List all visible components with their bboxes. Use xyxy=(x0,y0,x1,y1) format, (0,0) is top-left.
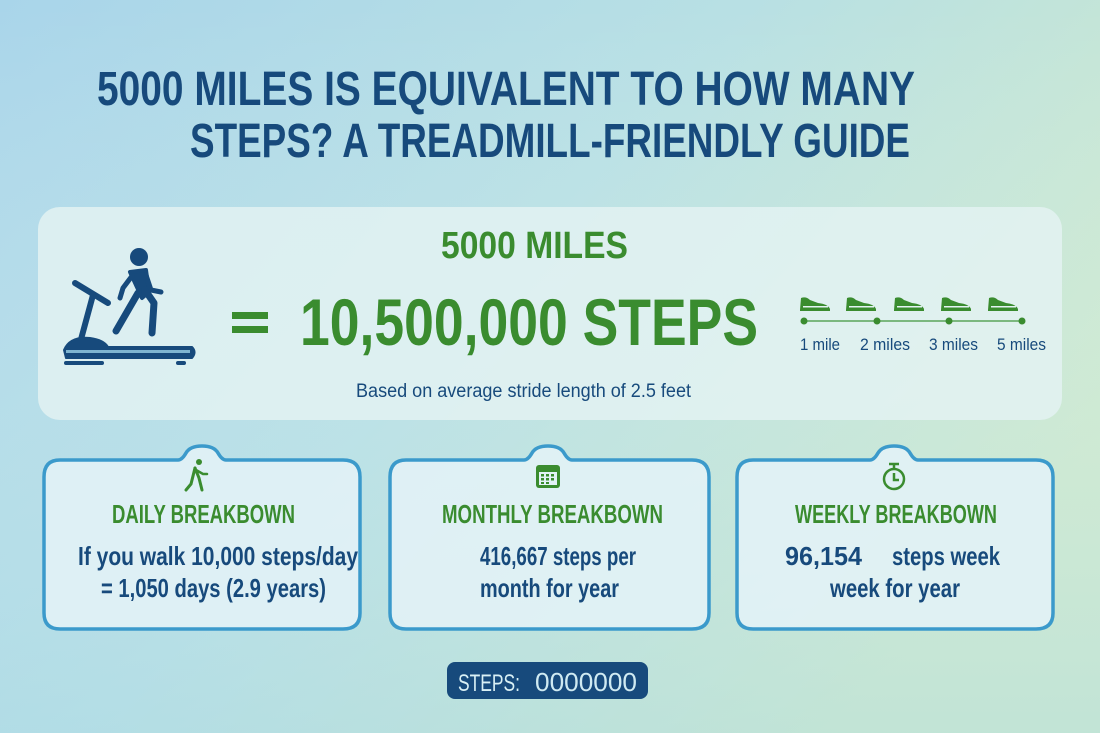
heading: 5000 miles: 5000 MILES xyxy=(441,225,628,267)
mile scale with shoes: 3 miles xyxy=(929,335,978,354)
step counter xyxy=(447,662,648,699)
panel: monthly breakdown: month for year xyxy=(480,573,619,603)
step counter: 0000000 xyxy=(535,667,637,697)
title xyxy=(97,63,915,168)
panel: weekly breakdown: WEEKLY BREAKBOWN xyxy=(795,499,997,529)
panel: daily breakdown: = 1,050 days (2.9 years) xyxy=(101,573,326,603)
panel: daily breakdown xyxy=(44,446,360,629)
title: STEPS? A TREADMILL-FRIENDLY GUIDE xyxy=(190,115,910,168)
panel: weekly breakdown: 96,154 xyxy=(785,541,863,571)
panel: monthly breakdown: MONTHLY BREAKBOWN xyxy=(442,499,663,529)
panel: daily breakdown: If you walk 10,000 steps/day xyxy=(78,541,358,571)
panel: monthly breakdown xyxy=(390,446,709,629)
icon: treadmill xyxy=(64,248,194,363)
note: stride length: Based on average stride length of 2.5 feet xyxy=(356,381,692,402)
mile scale with shoes: 5 miles xyxy=(997,335,1046,354)
step counter: STEPS: xyxy=(458,670,520,697)
mile scale with shoes xyxy=(800,297,1046,354)
panel: weekly breakdown: week for year xyxy=(829,573,960,603)
big number: steps: 10,500,000 STEPS xyxy=(300,285,758,359)
mile scale with shoes: 1 mile xyxy=(800,335,840,354)
equals sign xyxy=(232,312,268,333)
panel: daily breakdown: DAILY BREAKBOWN xyxy=(112,499,295,529)
title: 5000 MILES IS EQUIVALENT TO HOW MANY xyxy=(97,63,915,116)
panel: main result xyxy=(38,207,1062,420)
mile scale with shoes: 2 miles xyxy=(860,335,910,354)
icon: calendar xyxy=(536,465,560,488)
panel: monthly breakdown: 416,667 steps per xyxy=(480,541,636,571)
icon: stopwatch xyxy=(884,464,904,489)
panel: weekly breakdown xyxy=(737,446,1053,629)
panel: weekly breakdown: steps week xyxy=(892,541,1000,571)
icon: walker xyxy=(186,459,207,490)
